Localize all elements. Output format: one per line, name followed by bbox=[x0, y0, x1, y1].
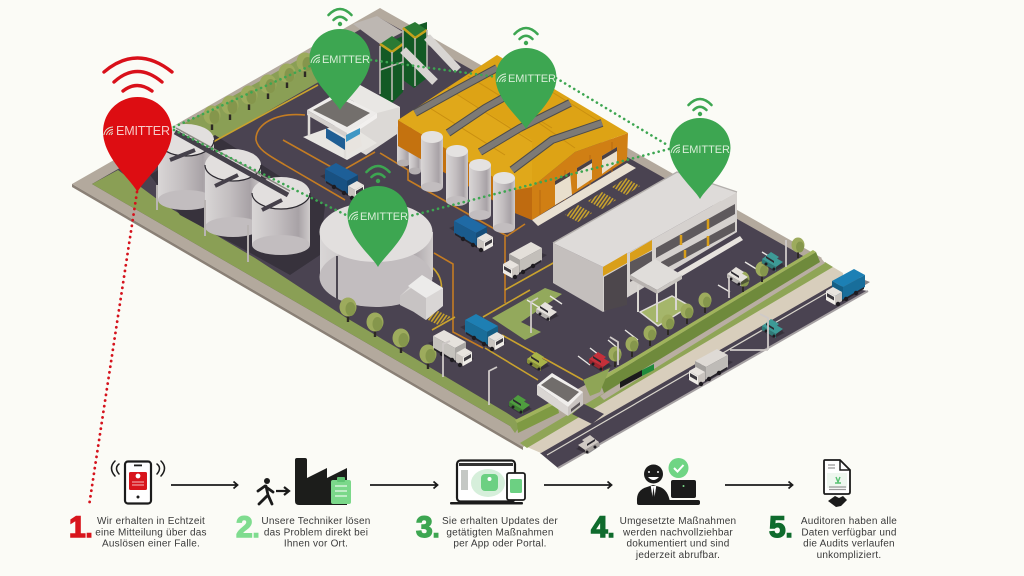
step text 3: per App oder Portal. bbox=[453, 539, 547, 550]
large tank with annex bbox=[320, 202, 443, 320]
perimeter hedge bbox=[515, 250, 820, 433]
arrow 1 to 2 bbox=[171, 482, 238, 488]
icon: red wifi signal bbox=[104, 58, 172, 91]
tall silos bbox=[421, 131, 515, 233]
warehouse bbox=[398, 55, 628, 220]
arrow 3 to 4 bbox=[544, 482, 612, 488]
road bbox=[540, 285, 868, 468]
site base wall bbox=[72, 8, 822, 447]
sidewalk bbox=[527, 267, 843, 453]
pin: green emitter office: EMITTER bbox=[682, 144, 730, 156]
boundary wall strip bbox=[600, 258, 825, 400]
step text 4: jederzeit abrufbar. bbox=[635, 550, 720, 561]
pin: green emitter warehouse bbox=[496, 28, 556, 129]
grass: southwest strip bbox=[92, 170, 522, 433]
step text 1: Auslösen einer Falle. bbox=[102, 539, 200, 550]
step text 4: Umgesetzte Maßnahmen bbox=[620, 516, 736, 527]
small silos bbox=[397, 121, 421, 174]
trees bbox=[204, 52, 804, 369]
icon: audit certificate with handshake bbox=[824, 460, 850, 507]
step 3 bbox=[416, 460, 558, 550]
step text 5: die Audits verlaufen bbox=[803, 539, 895, 550]
icon: auditor with laptop and check bbox=[637, 458, 700, 505]
pin: green emitter office bbox=[670, 99, 730, 199]
hatch marking: yard bbox=[424, 310, 451, 325]
step number 4: 4. bbox=[591, 511, 614, 544]
lamp posts bbox=[443, 240, 786, 405]
step text 2: das Problem direkt bei bbox=[264, 527, 368, 538]
pin: green emitter conveyor: EMITTER bbox=[322, 54, 370, 66]
step 1 bbox=[69, 461, 207, 550]
connection: red dotted line to step 1 bbox=[89, 192, 137, 506]
parking bay lines bbox=[527, 252, 775, 365]
step 2 bbox=[236, 458, 371, 550]
step text 3: getätigten Maßnahmen bbox=[446, 527, 554, 538]
icon: phone alert bbox=[112, 461, 164, 504]
gate sign bbox=[620, 370, 642, 388]
asphalt ground bbox=[92, 18, 812, 426]
pin: red emitter bbox=[103, 58, 172, 192]
vehicles bbox=[320, 163, 870, 454]
parking grass island bbox=[492, 288, 562, 340]
grass: northwest tree strip bbox=[172, 52, 322, 143]
conveyor towers bbox=[353, 16, 458, 103]
storage tanks bbox=[157, 124, 310, 262]
icon: laptop and tablet portal bbox=[450, 460, 525, 504]
office building bbox=[553, 172, 743, 312]
tank foundation shadow bbox=[150, 135, 325, 275]
gate crossing bbox=[572, 404, 604, 424]
step text 2: Unsere Techniker lösen bbox=[261, 516, 371, 527]
step text 2: Ihnen vor Ort. bbox=[284, 539, 348, 550]
step number 5: 5. bbox=[769, 511, 792, 544]
step number 2: 2. bbox=[236, 511, 259, 544]
entrance canopy bbox=[630, 259, 690, 326]
arrow 4 to 5 bbox=[725, 482, 792, 488]
solar strips bbox=[415, 68, 602, 170]
road markings bbox=[213, 85, 583, 380]
step text 4: werden nachvollziehbar bbox=[622, 527, 733, 538]
yard hatch markings bbox=[565, 178, 640, 222]
arrow 2 to 3 bbox=[370, 482, 438, 488]
step number 1: 1. bbox=[69, 511, 92, 544]
guardhouse bbox=[537, 373, 583, 416]
step text 4: dokumentiert und sind bbox=[626, 539, 730, 550]
step 5 bbox=[769, 460, 897, 561]
icon: technician walking to factory bbox=[258, 458, 351, 505]
step text 5: Daten verfügbar und bbox=[801, 527, 897, 538]
step text 5: unkompliziert. bbox=[817, 550, 881, 561]
step text 3: Sie erhalten Updates der bbox=[442, 516, 558, 527]
step text 1: Wir erhalten in Echtzeit bbox=[97, 516, 205, 527]
connection: green dotted network bbox=[174, 60, 669, 216]
pin: red emitter: EMITTER bbox=[116, 124, 170, 138]
pin: green emitter warehouse: EMITTER bbox=[508, 73, 556, 85]
illustration: isometric factory site bbox=[72, 8, 870, 468]
warehouse apron bbox=[532, 163, 636, 226]
pin: green emitter conveyor bbox=[310, 9, 370, 110]
step text 5: Auditoren haben alle bbox=[801, 516, 897, 527]
service building bbox=[303, 85, 400, 160]
pin: green emitter large tank bbox=[348, 166, 408, 267]
step number 3: 3. bbox=[416, 511, 439, 544]
step text 1: eine Mitteilung über das bbox=[95, 527, 207, 538]
pin: green emitter large tank: EMITTER bbox=[360, 211, 408, 223]
step 4 bbox=[591, 458, 736, 561]
grass verge bbox=[520, 262, 833, 448]
